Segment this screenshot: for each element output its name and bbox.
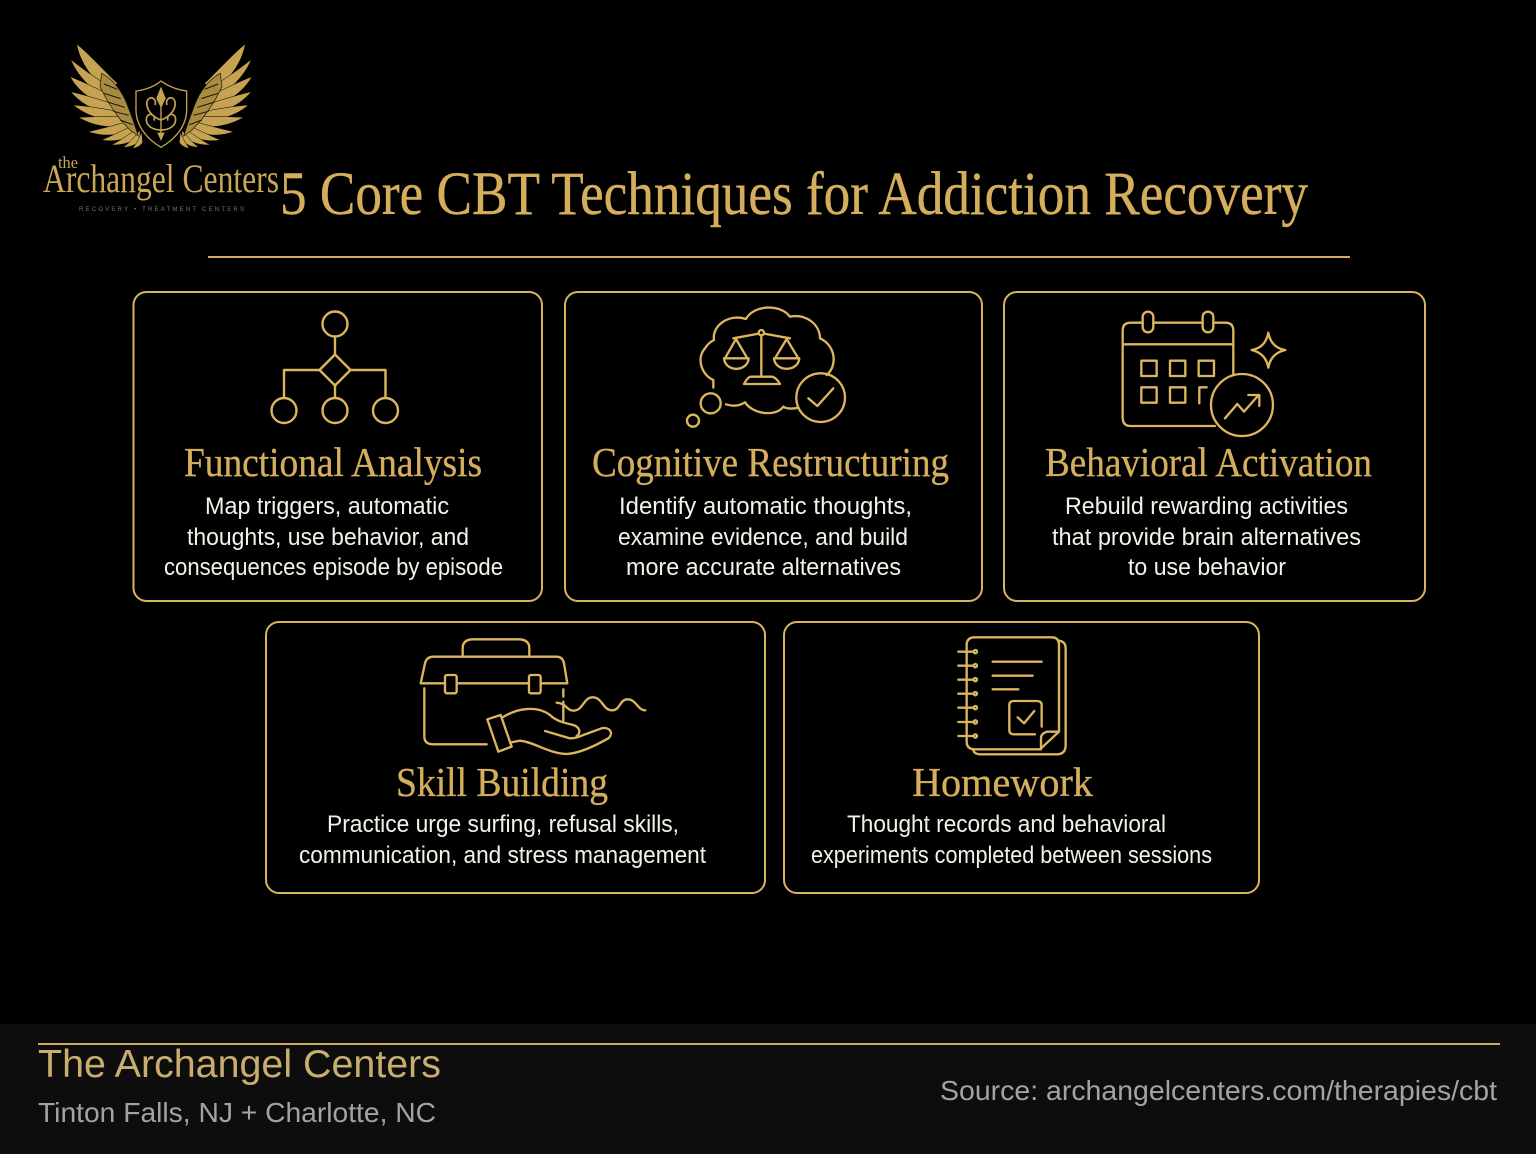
icon: flow diagram: [272, 312, 398, 423]
footer organisation name: The Archangel Centers: [38, 1043, 441, 1086]
heading: Cognitive Restructuring: [592, 439, 949, 485]
description: experiments completed between sessions: [811, 842, 1212, 869]
description: [164, 493, 503, 581]
heading: Skill Building: [396, 759, 608, 805]
panel: Skill Building: [266, 622, 765, 893]
description: to use behavior: [1128, 554, 1286, 581]
description: examine evidence, and build: [618, 524, 908, 551]
description: Rebuild rewarding activities: [1065, 493, 1348, 520]
logo: The Archangel Centers: [43, 44, 279, 213]
heading: Homework: [912, 759, 1093, 805]
description: Map triggers, automatic: [205, 493, 449, 520]
logo tagline: RECOVERY • TREATMENT CENTERS: [79, 207, 244, 213]
description: [1052, 493, 1361, 581]
description: that provide brain alternatives: [1052, 524, 1361, 551]
description: Identify automatic thoughts,: [619, 493, 912, 520]
heading: Functional Analysis: [184, 439, 482, 485]
description: [811, 811, 1212, 869]
description: communication, and stress management: [299, 842, 706, 869]
panel: Cognitive Restructuring: [565, 292, 982, 601]
icon: thought cloud with scales and check: [687, 308, 845, 427]
footer: [0, 1024, 1536, 1154]
description: Practice urge surfing, refusal skills,: [327, 811, 679, 838]
description: Thought records and behavioral: [847, 811, 1166, 838]
icon: winged shield: [70, 44, 252, 148]
description: [299, 811, 706, 869]
heading: Behavioral Activation: [1045, 439, 1372, 485]
description: more accurate alternatives: [626, 554, 901, 581]
title divider: [208, 256, 1350, 258]
panel: Functional Analysis: [134, 292, 542, 601]
logo wordmark: the: [58, 153, 78, 172]
icon: calendar with growth arrow and sparkle: [1123, 312, 1285, 436]
panel: Behavioral Activation: [1004, 292, 1425, 601]
logo: The Archangel Centers: Archangel Centers: [43, 156, 279, 201]
icon: spiral notebook with checkbox: [958, 637, 1066, 754]
icon: toolbox with open hand and wave: [421, 639, 645, 754]
footer locations: Tinton Falls, NJ + Charlotte, NC: [38, 1097, 436, 1128]
description: consequences episode by episode: [164, 554, 503, 581]
description: [618, 493, 912, 581]
panel: Homework: [784, 622, 1259, 893]
shield: [136, 81, 187, 147]
title: 5 Core CBT Techniques for Addiction Recovery: [280, 161, 1308, 228]
description: thoughts, use behavior, and: [187, 524, 469, 551]
footer source: Source: archangelcenters.com/therapies/cbt: [940, 1075, 1497, 1106]
